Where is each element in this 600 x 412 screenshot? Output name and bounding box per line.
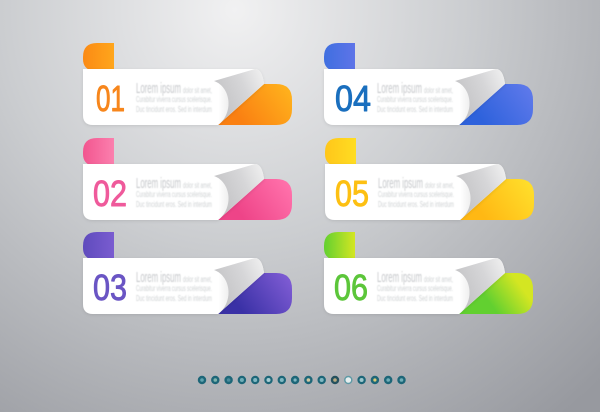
text block: [378, 175, 454, 209]
text block: Curabitur viverra cursus scelerisque.: [377, 284, 453, 293]
colored end: [459, 273, 533, 314]
text block: dolor sit amet,: [425, 181, 454, 190]
curl white fold: [203, 176, 229, 220]
number: 02: [93, 173, 127, 214]
number: 04: [335, 78, 371, 119]
text block: dolor sit amet,: [183, 181, 212, 190]
panel: step 02 pink: [83, 138, 292, 220]
tab: [324, 232, 355, 260]
curl white fold: [444, 81, 470, 125]
text block: Lorem ipsum: [378, 175, 423, 192]
text block: dolor sit amet,: [424, 86, 453, 95]
text block: [136, 269, 212, 303]
number: 05: [335, 173, 369, 214]
colored end: [218, 179, 292, 220]
tab: [83, 232, 114, 260]
panel: step 06 green: [324, 232, 533, 314]
text block: Lorem ipsum: [377, 269, 422, 286]
colored end: [459, 84, 533, 125]
panel: step 01 orange: [83, 43, 292, 125]
number: 01: [96, 78, 125, 119]
curl white fold: [203, 270, 229, 314]
text block: Curabitur viverra cursus scelerisque.: [377, 95, 453, 104]
white card: [325, 164, 506, 220]
page curl: [456, 164, 506, 220]
text block: Curabitur viverra cursus scelerisque.: [136, 95, 212, 104]
text block: Duc tincidunt eros. Sed in interdum: [377, 294, 453, 303]
curl white fold: [444, 270, 470, 314]
page curl: [455, 258, 505, 314]
text block: Duc tincidunt eros. Sed in interdum: [136, 294, 212, 303]
text block: dolor sit amet,: [183, 86, 212, 95]
tab: [83, 43, 114, 71]
panel: step 05 yellow: [325, 138, 534, 220]
number: 03: [93, 267, 127, 308]
text block: Duc tincidunt eros. Sed in interdum: [136, 200, 212, 209]
text block: Lorem ipsum: [377, 80, 422, 97]
text block: Curabitur viverra cursus scelerisque.: [378, 190, 454, 199]
text block: Lorem ipsum: [136, 175, 181, 192]
white card: [83, 69, 264, 125]
text block: [377, 269, 453, 303]
text block: Duc tincidunt eros. Sed in interdum: [377, 105, 453, 114]
panel: step 03 purple: [83, 232, 292, 314]
white card: [83, 164, 264, 220]
white card: [83, 258, 264, 314]
colored end: [218, 273, 292, 314]
white card: [324, 258, 505, 314]
tab: [324, 43, 355, 71]
page curl: [455, 69, 505, 125]
curl white fold: [203, 81, 229, 125]
text block: Lorem ipsum: [136, 80, 181, 97]
text block: Duc tincidunt eros. Sed in interdum: [378, 200, 454, 209]
text block: dolor sit amet,: [183, 275, 212, 284]
text block: Curabitur viverra cursus scelerisque.: [136, 284, 212, 293]
text block: Duc tincidunt eros. Sed in interdum: [136, 105, 212, 114]
colored end: [218, 84, 292, 125]
page curl: [214, 164, 264, 220]
page curl: [214, 69, 264, 125]
text block: Curabitur viverra cursus scelerisque.: [136, 190, 212, 199]
tab: [83, 138, 114, 166]
text block: dolor sit amet,: [424, 275, 453, 284]
panel: step 04 blue: [324, 43, 533, 125]
colored end: [460, 179, 534, 220]
page curl: [214, 258, 264, 314]
text block: [136, 175, 212, 209]
tab: [325, 138, 356, 166]
text block: [377, 80, 453, 114]
icon row: [198, 376, 406, 384]
curl white fold: [445, 176, 471, 220]
text block: [136, 80, 212, 114]
number: 06: [334, 267, 368, 308]
white card: [324, 69, 505, 125]
text block: Lorem ipsum: [136, 269, 181, 286]
